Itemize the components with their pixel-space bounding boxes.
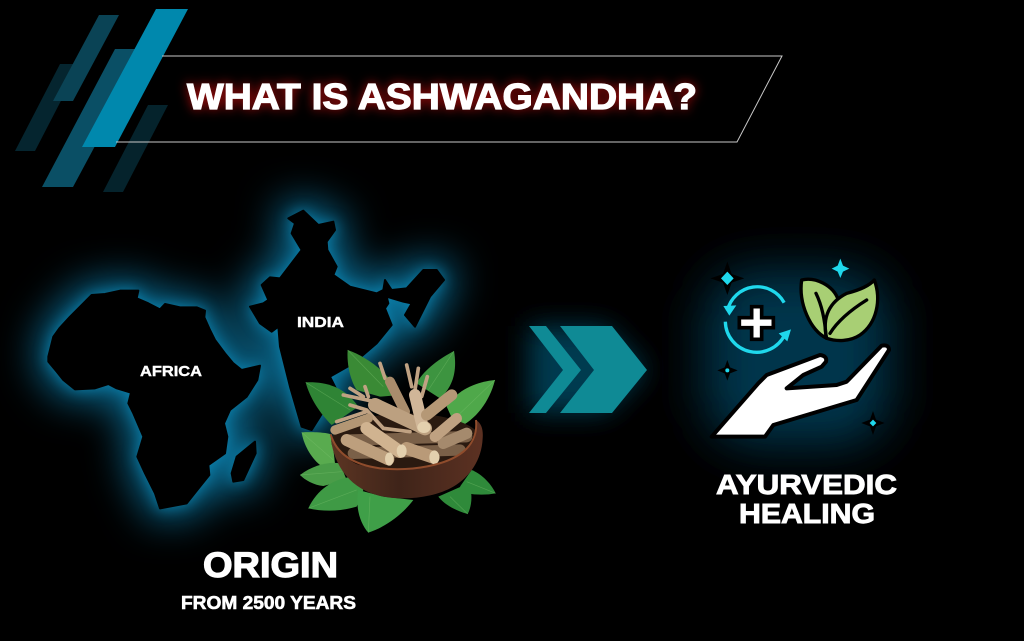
label: India: INDIA	[297, 314, 344, 331]
illustration: bowl of ashwagandha roots with leaves	[300, 350, 496, 533]
panel: origin map	[48, 211, 444, 508]
icon: leaves	[801, 279, 878, 341]
arrow: double chevron	[529, 326, 647, 413]
panel: Ayurvedic healing icon	[710, 259, 889, 437]
heading: Ayurvedic healing	[716, 469, 897, 529]
heading: origin: ORIGIN	[203, 546, 338, 585]
label: Africa: AFRICA	[140, 363, 202, 380]
decorative slanted bars	[15, 9, 188, 192]
title banner frame	[116, 56, 782, 142]
arrow glow	[529, 326, 647, 413]
heading: Ayurvedic healing: AYURVEDIC	[716, 469, 897, 500]
icon: healing cycle with cross	[723, 283, 791, 352]
heading: Ayurvedic healing: HEALING	[739, 498, 875, 529]
title: WHAT IS ASHWAGANDHA?	[187, 76, 697, 117]
icon: hand	[712, 345, 889, 437]
icon glow	[705, 270, 890, 445]
icons: sparkles	[710, 259, 885, 435]
map: India	[250, 211, 444, 430]
subheading: from 2500 years: FROM 2500 YEARS	[181, 593, 356, 613]
map: Africa	[48, 291, 260, 508]
